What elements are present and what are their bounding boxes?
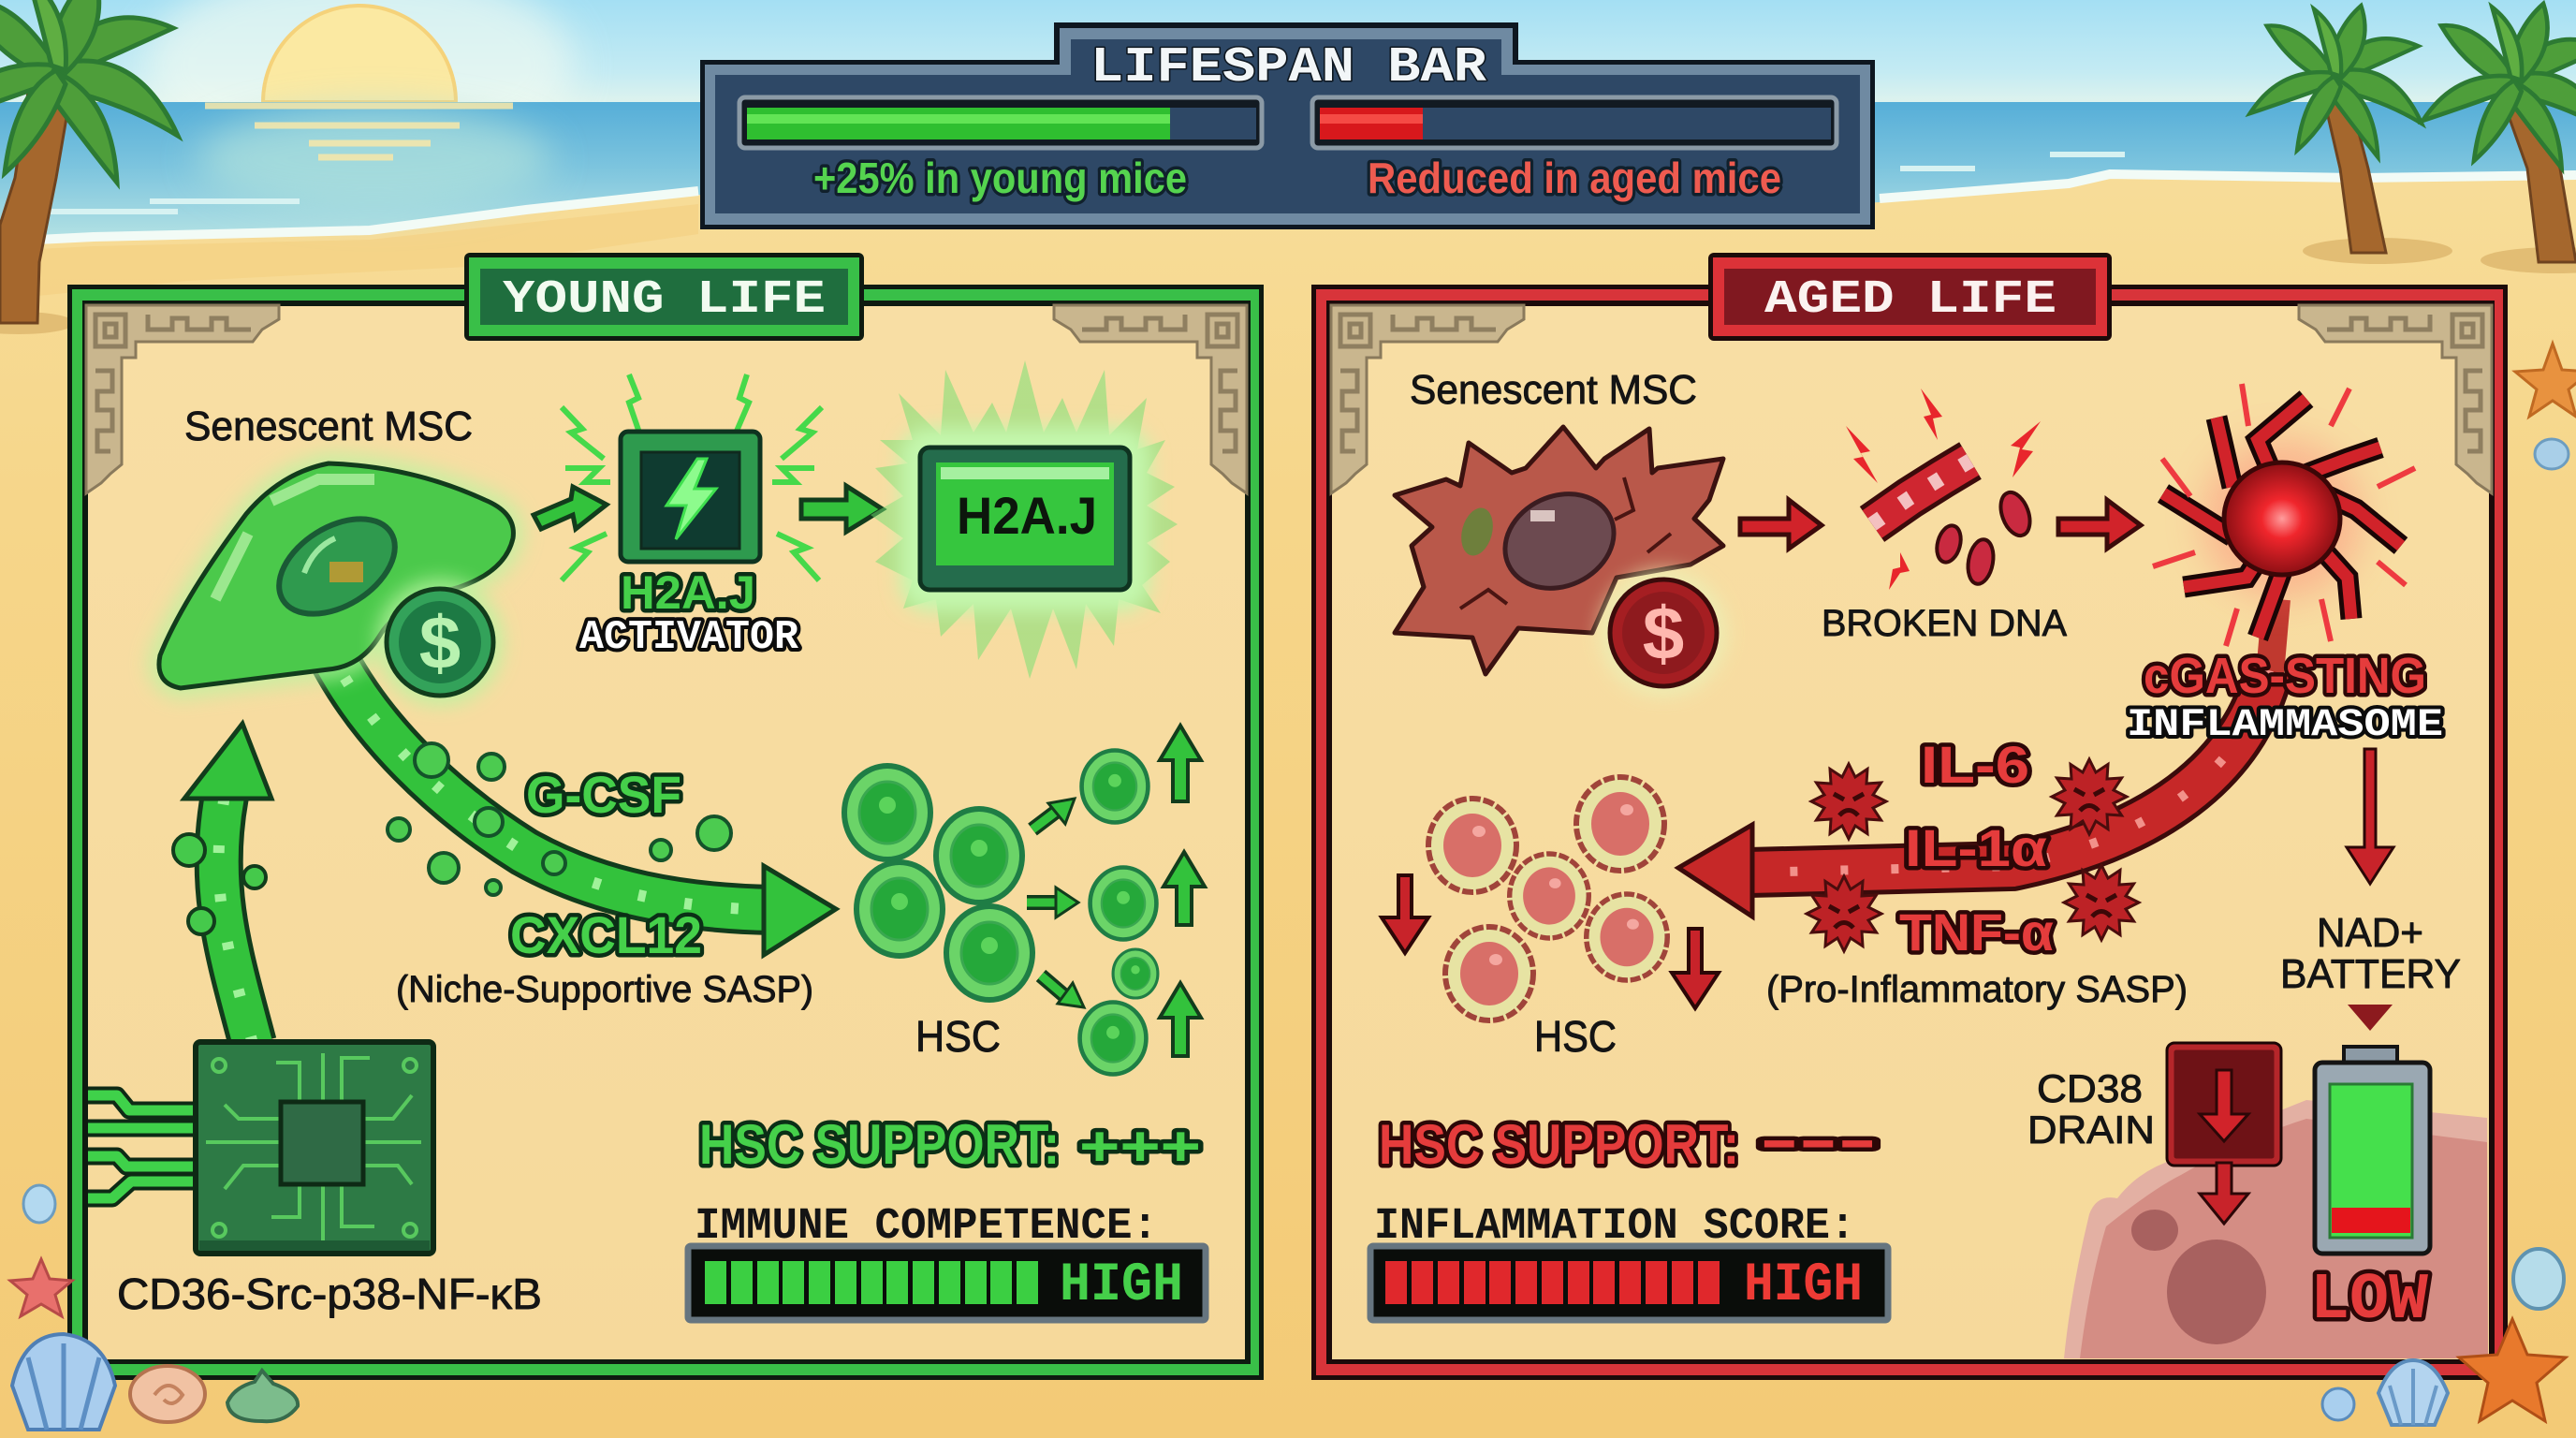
icon: aged HSC cluster bbox=[1428, 777, 1667, 1020]
young lifespan caption: +25% in young mice bbox=[813, 154, 1187, 202]
icon: drain box bbox=[2167, 1043, 2281, 1224]
arrow: inflammasome to battery bbox=[2347, 749, 2393, 884]
label: CD38 drain: CD38 bbox=[2037, 1066, 2143, 1110]
label: IL-6: IL-6 bbox=[1921, 735, 2029, 794]
icon: circuit chip bbox=[88, 1042, 433, 1254]
icon: dollar coin aged: $ bbox=[1643, 592, 1684, 675]
label: inflammation score: INFLAMMATION SCORE: bbox=[1374, 1202, 1855, 1252]
bar: inflammation score: HIGH bbox=[1744, 1255, 1863, 1316]
aged life tab bbox=[1708, 253, 2112, 341]
bar: immune competence bbox=[688, 1246, 1206, 1320]
icon: dollar coin aged bbox=[1600, 569, 1727, 697]
aged lifespan bar bbox=[1312, 97, 1837, 148]
label: cGAS-STING inflammasome: cGAS-STING bbox=[2144, 648, 2426, 704]
arrow: activator to H2A.J block bbox=[801, 486, 883, 532]
bubbles: secreted factors bbox=[388, 743, 731, 895]
label: HSC aged: HSC bbox=[1534, 1012, 1617, 1061]
icon: damaged MSC cell bbox=[1395, 427, 1723, 674]
icons: down arrows aged HSC bbox=[1382, 875, 1719, 1008]
panel: lifespan bar bbox=[700, 22, 1875, 229]
label: NAD+ battery: NAD+ bbox=[2317, 910, 2423, 956]
label: pro-inflammatory SASP: (Pro-Inflammatory SASP) bbox=[1766, 969, 2188, 1010]
label: NAD+ battery: BATTERY bbox=[2280, 951, 2461, 997]
bar: immune competence: HIGH bbox=[1060, 1255, 1183, 1316]
icon: blue pebble right bbox=[2322, 1388, 2354, 1420]
palm tree left bbox=[0, 0, 178, 323]
corner ornament left bbox=[1331, 305, 1524, 493]
icon: H2A.J block: H2A.J bbox=[957, 486, 1097, 545]
icon: H2A.J activator bbox=[562, 374, 822, 580]
icon: green shell bbox=[227, 1371, 298, 1421]
icon: blue shell right bbox=[2378, 1360, 2448, 1425]
icon: blue pebble left bbox=[23, 1185, 55, 1223]
label: broken DNA: BROKEN DNA bbox=[1822, 603, 2067, 644]
arrow: MSC to broken DNA bbox=[1740, 500, 1822, 549]
label: HSC support aged: --- bbox=[1760, 1108, 1877, 1172]
label: niche-supportive SASP: (Niche-Supportive SASP) bbox=[396, 969, 813, 1010]
sea bbox=[0, 102, 2576, 245]
icon: blue shell left bbox=[12, 1334, 115, 1430]
label: IL-1 alpha: IL-1α bbox=[1905, 818, 2047, 877]
icon: broken DNA bbox=[1846, 389, 2041, 590]
icon: pink bone marrow cell bbox=[2064, 1100, 2488, 1358]
label: senescent MSC aged: Senescent MSC bbox=[1410, 367, 1697, 413]
icon: blue pebble upper right bbox=[2535, 439, 2569, 469]
icon: pink starfish bbox=[10, 1259, 72, 1316]
label: immune competence: IMMUNE COMPETENCE: bbox=[695, 1202, 1158, 1252]
arrow: inflammasome to HSC bbox=[1678, 599, 2276, 917]
corner ornament right bbox=[1054, 305, 1247, 493]
icon: orange starfish upper right bbox=[2515, 344, 2576, 417]
icon: young HSC cluster bbox=[844, 751, 1158, 1075]
label: HSC support young: HSC SUPPORT: bbox=[699, 1113, 1060, 1176]
label: H2A.J activator: ACTIVATOR bbox=[579, 614, 799, 661]
label: HSC support young: +++ bbox=[1079, 1115, 1201, 1178]
label: H2A.J activator bbox=[579, 566, 799, 661]
young life tab: YOUNG LIFE bbox=[503, 273, 826, 327]
label: HSC young: HSC bbox=[915, 1012, 1001, 1061]
arrow: DNA to inflammasome bbox=[2058, 500, 2141, 549]
corner ornament right bbox=[2299, 305, 2492, 493]
label: senescent MSC young: Senescent MSC bbox=[184, 404, 473, 449]
icon: dollar coin young: $ bbox=[419, 601, 461, 684]
icon: H2A.J block bbox=[871, 360, 1178, 679]
aged lifespan caption: Reduced in aged mice bbox=[1368, 154, 1781, 202]
palm tree right far bbox=[2422, 4, 2576, 262]
icon: cGAS-STING inflammasome spider bbox=[2153, 384, 2415, 646]
label: CXCL12: CXCL12 bbox=[510, 905, 702, 964]
label: cGAS-STING inflammasome bbox=[2127, 648, 2443, 747]
icon: small down triangle bbox=[2348, 1005, 2393, 1031]
label: HSC support aged: HSC SUPPORT: bbox=[1379, 1113, 1739, 1176]
aged life tab: AGED LIFE bbox=[1764, 273, 2056, 327]
arrow: MSC to HSC bbox=[323, 637, 836, 955]
palm tree right near bbox=[2250, 6, 2422, 253]
corner ornament left bbox=[86, 305, 279, 493]
label: cGAS-STING inflammasome: INFLAMMASOME bbox=[2127, 702, 2443, 747]
sun bbox=[263, 6, 456, 102]
young life tab bbox=[464, 253, 864, 341]
label: LOW: LOW bbox=[2310, 1264, 2428, 1338]
bar: inflammation score bbox=[1370, 1246, 1888, 1320]
label: NAD+ battery bbox=[2280, 910, 2461, 997]
icons: cytokine viruses bbox=[1807, 759, 2139, 951]
label: CD38 drain: DRAIN bbox=[2027, 1108, 2155, 1152]
icon: blue egg shell bbox=[2513, 1249, 2564, 1309]
label: CD38 drain bbox=[2027, 1066, 2155, 1152]
icon: dollar coin young bbox=[376, 579, 504, 706]
panel: aged life bbox=[1311, 253, 2508, 1380]
arrow: MSC to activator bbox=[534, 487, 607, 529]
icon: peach shell bbox=[130, 1366, 205, 1422]
young lifespan bar bbox=[739, 97, 1262, 148]
label: G-CSF: G-CSF bbox=[526, 765, 681, 824]
label: CD36 pathway: CD36-Src-p38-NF-κB bbox=[117, 1269, 542, 1318]
label: H2A.J activator: H2A.J bbox=[621, 566, 755, 619]
icon: green MSC cell bbox=[159, 463, 513, 688]
icons: up arrows bbox=[1160, 726, 1205, 1056]
panel: young life bbox=[67, 253, 1264, 1380]
icon: orange starfish bbox=[2459, 1319, 2566, 1421]
icon: NAD+ battery bbox=[2315, 1047, 2430, 1254]
arrow: up from chip to MSC bbox=[173, 724, 271, 1044]
lifespan title: LIFESPAN BAR bbox=[1090, 39, 1486, 95]
label: TNF alpha: TNF-α bbox=[1899, 902, 2054, 961]
